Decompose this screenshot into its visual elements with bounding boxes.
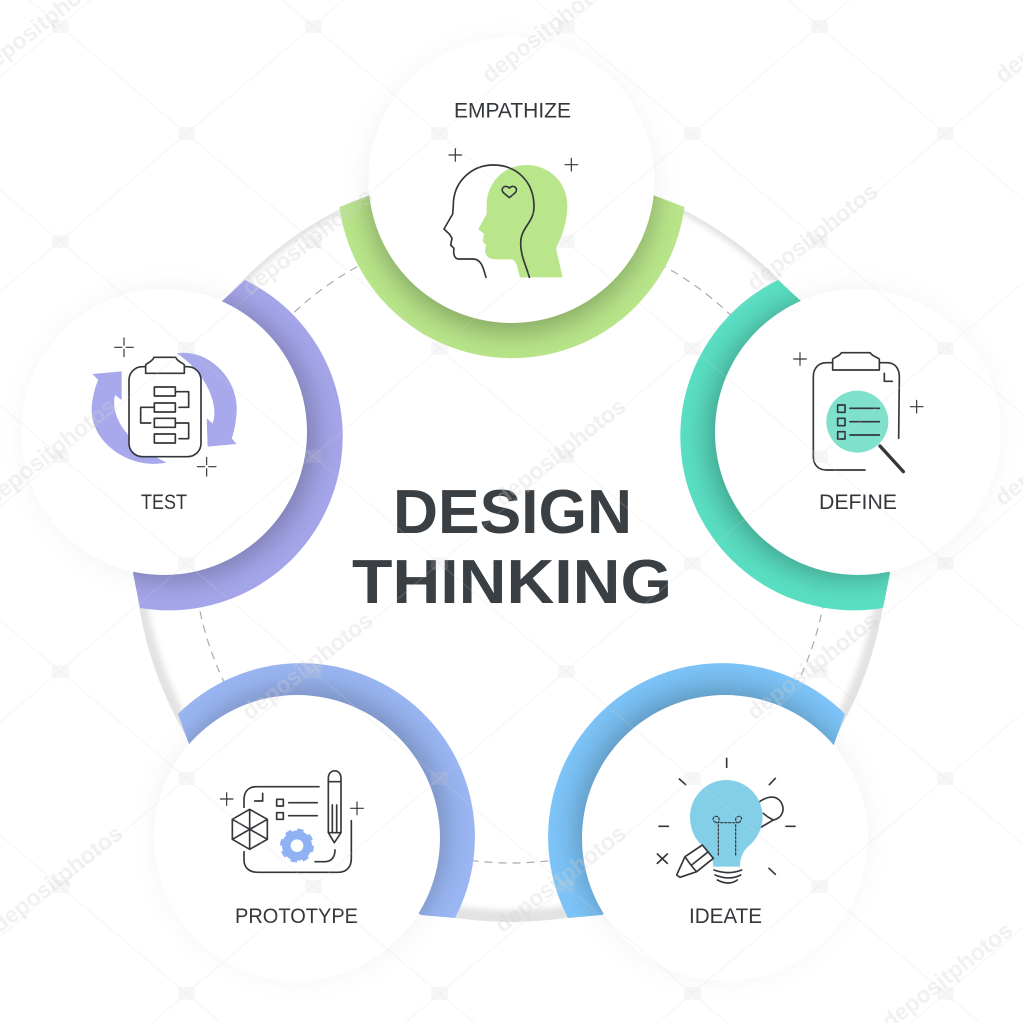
background ring bbox=[134, 168, 888, 922]
watermark text: depositphotos bbox=[237, 607, 378, 725]
icon: blueprint with pencil, hexagon and gear bbox=[220, 771, 363, 872]
panel: prototype bbox=[178, 663, 475, 923]
label: prototype: PROTOTYPE bbox=[235, 905, 358, 928]
panel: empathize bbox=[340, 103, 684, 358]
label: define: DEFINE bbox=[819, 491, 897, 514]
icon: clipboard with magnifier bbox=[794, 353, 923, 472]
panel: ideate bbox=[548, 663, 845, 923]
watermark text: depositphotos bbox=[490, 820, 631, 938]
label: empathize: EMPATHIZE bbox=[454, 100, 571, 122]
icon: clipboard with cycle arrows bbox=[92, 338, 237, 476]
title: THINKING bbox=[352, 548, 672, 617]
label: ideate: IDEATE bbox=[689, 905, 762, 928]
title: DESIGN bbox=[393, 478, 632, 547]
title bbox=[352, 478, 672, 617]
icon: light bulb with pencil bbox=[657, 758, 795, 883]
watermark text: depositphotos bbox=[742, 178, 883, 296]
panel: test bbox=[92, 280, 343, 610]
watermark text: depositphotos bbox=[742, 607, 883, 725]
icon: heads with heart bbox=[444, 149, 578, 277]
panel: define bbox=[680, 280, 924, 610]
label: test: TEST bbox=[141, 491, 187, 514]
watermark text: depositphotos bbox=[490, 393, 631, 511]
watermark text: depositphotos bbox=[237, 183, 378, 301]
